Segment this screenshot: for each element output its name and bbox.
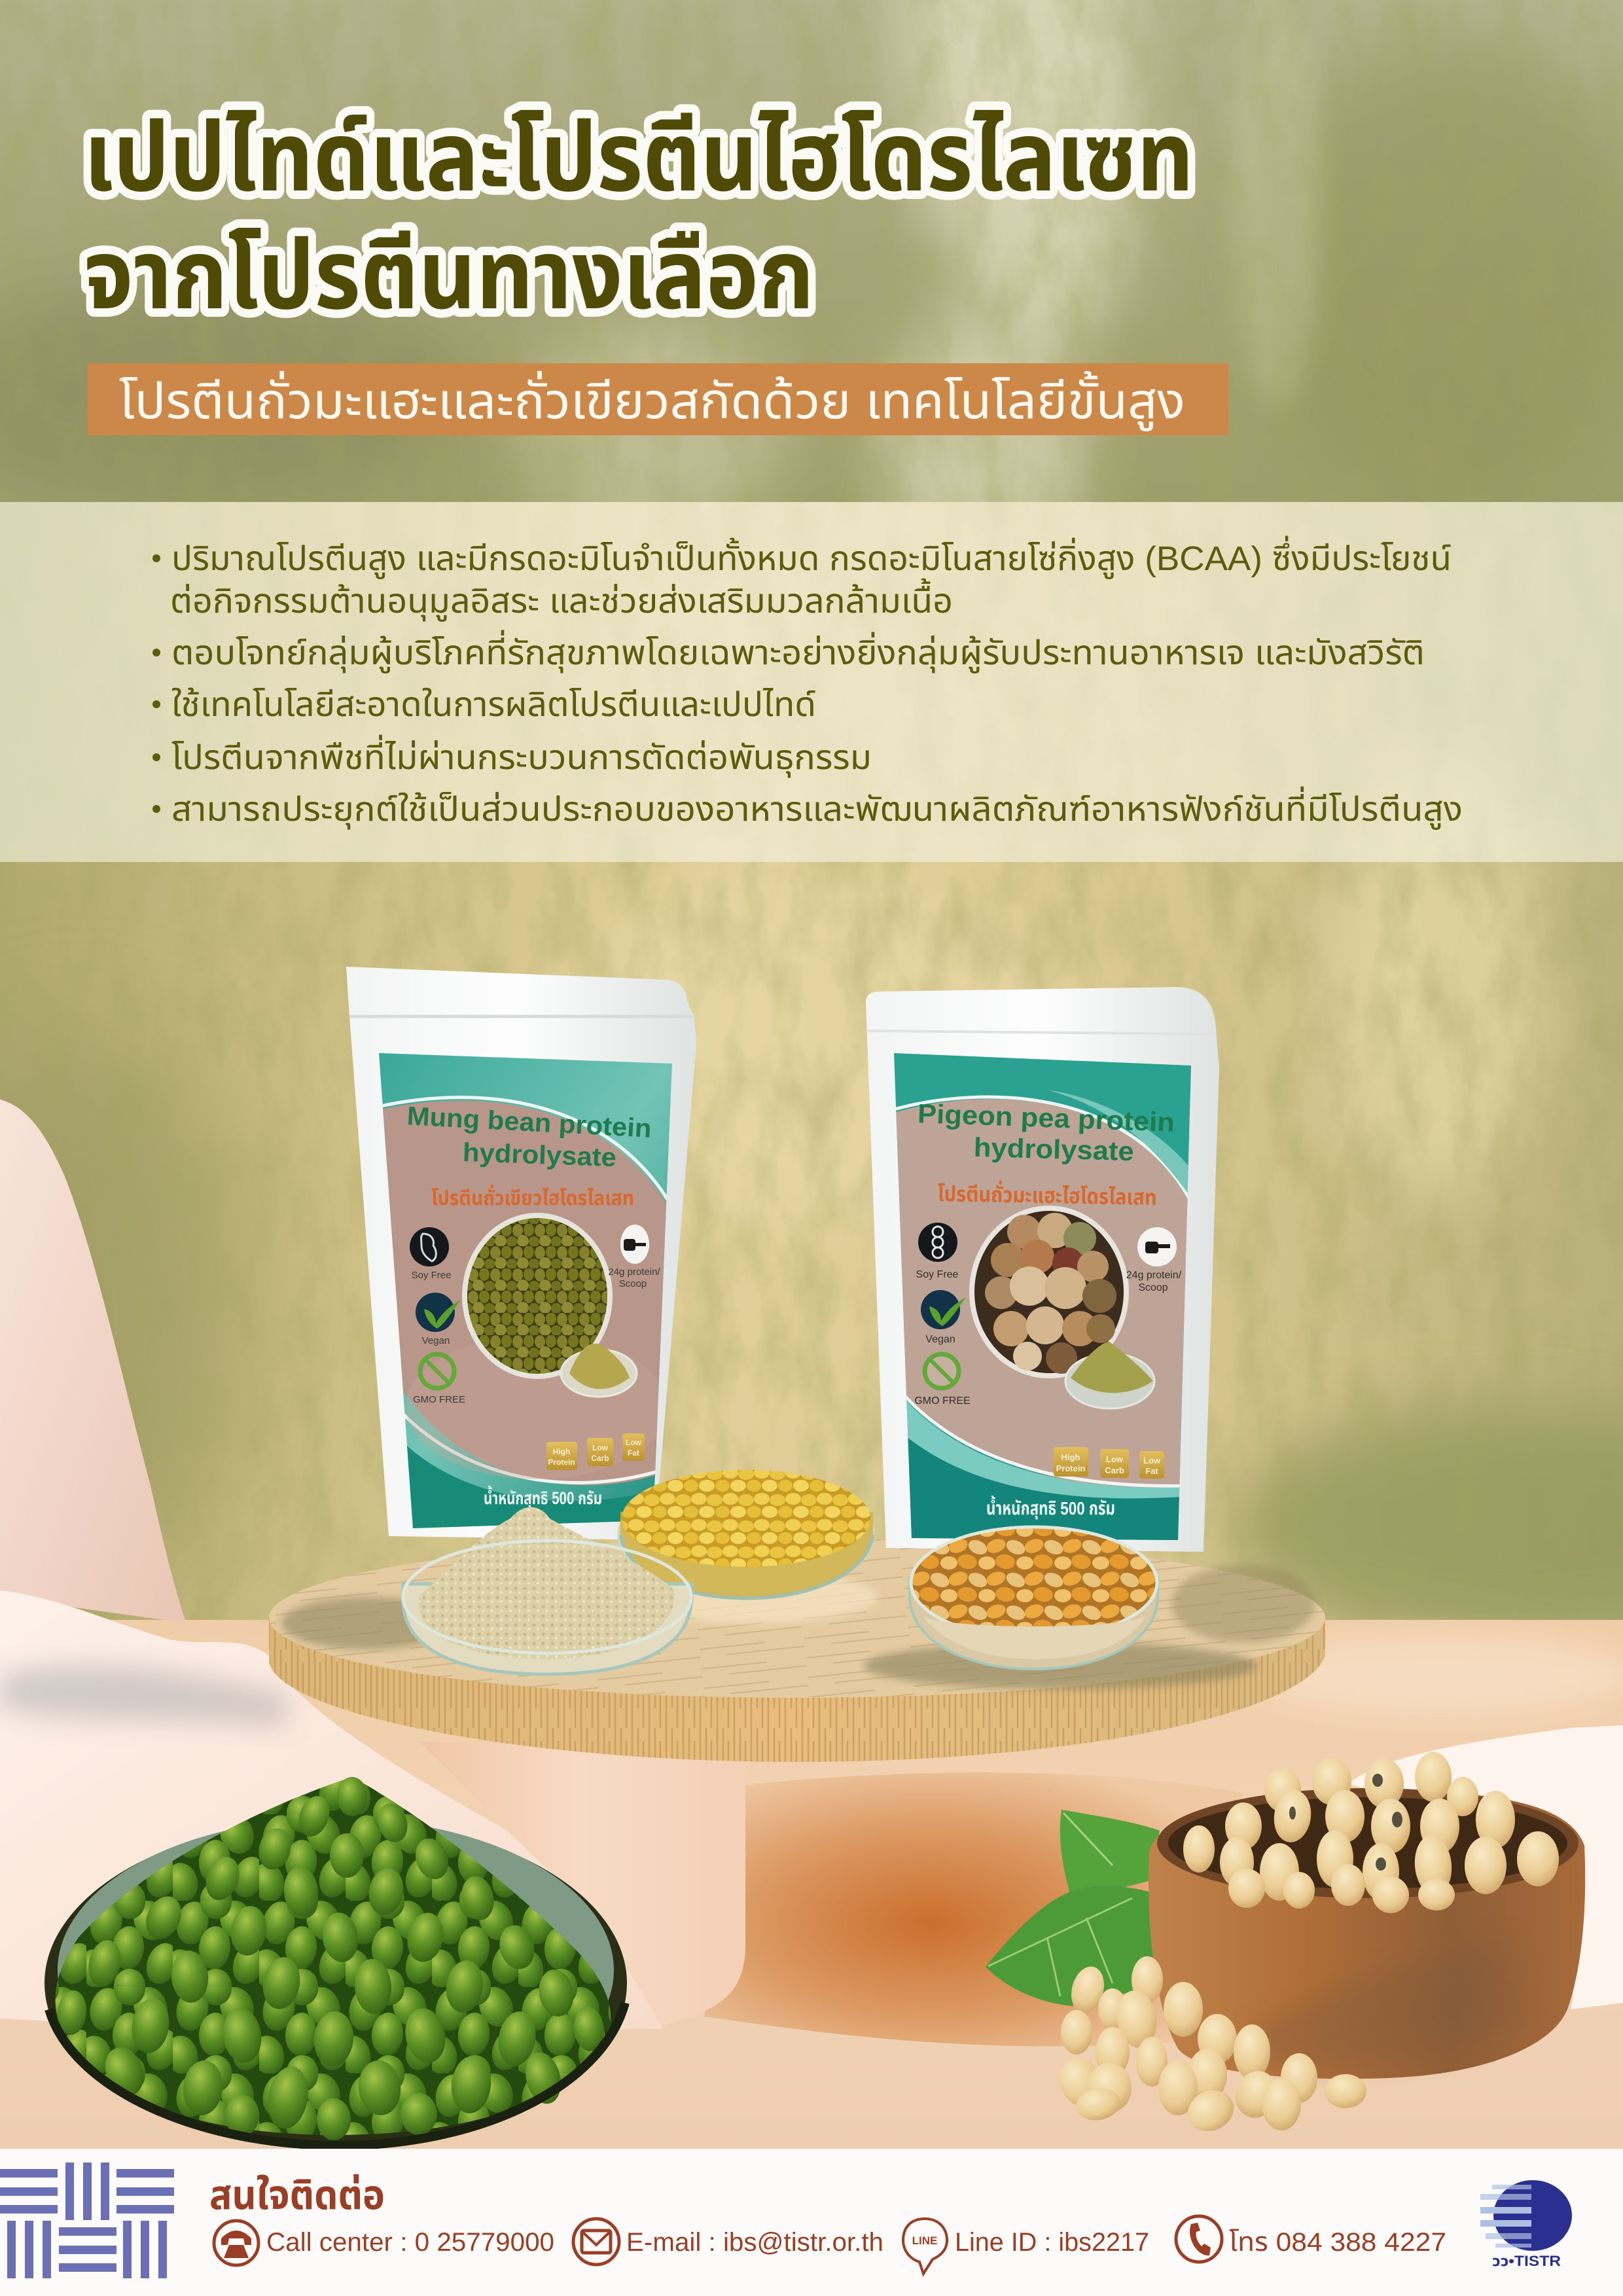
pigeon pouch pea photo	[969, 1206, 1154, 1408]
TISTR logo: วว•TISTR	[1492, 2253, 1561, 2269]
mung pouch bean photo	[462, 1213, 637, 1397]
floor orange shadow	[704, 1772, 1243, 2046]
call center contact	[214, 2221, 554, 2265]
footer contact heading: สนใจติดต่อ	[209, 2173, 385, 2218]
subtitle banner	[88, 363, 1228, 435]
mung pouch badges: Low	[626, 1438, 642, 1447]
pigeon pouch badges: 24g protein/	[1126, 1270, 1182, 1281]
pigeon pouch badges: GMO FREE	[914, 1395, 971, 1407]
footer weave logo	[0, 2162, 174, 2278]
email contact: E-mail : ibs@tistr.or.th	[626, 2228, 883, 2257]
mung pouch weight: น้ำหนักสุทธิ 500 กรัม	[484, 1486, 602, 1509]
pigeon pouch badges: Scoop	[1138, 1282, 1168, 1293]
pigeon pouch badges: Low	[1143, 1456, 1161, 1465]
product pouch: pigeon pea	[866, 987, 1219, 1552]
email contact	[573, 2219, 883, 2265]
subtitle banner: โปรตีนถั่วมะแฮะและถั่วเขียวสกัดด้วย เทคโนโลยีขั้นสูง	[119, 370, 1185, 431]
title: จากโปรตีนทางเลือก	[84, 221, 814, 329]
pigeon pouch text: hydrolysate	[973, 1132, 1134, 1166]
mung pouch badges: Scoop	[619, 1278, 647, 1289]
pigeon pouch badges: High	[1061, 1452, 1080, 1462]
white cloth right	[1348, 1725, 1623, 2009]
soybeans in bowl	[1183, 1752, 1559, 1913]
pigeon pouch text: โปรตีนถั่วมะแฮะไฮโดรไลเสท	[937, 1179, 1157, 1210]
translucent text band	[0, 502, 1623, 862]
phone contact	[1176, 2216, 1446, 2262]
pigeon pouch badges: Vegan	[925, 1334, 955, 1345]
pedestal column	[419, 1741, 745, 2026]
mung pouch badges	[410, 1225, 660, 1470]
pigeon pouch text: Pigeon pea protein	[917, 1098, 1175, 1138]
title: เปปไทด์และโปรตีนไฮโดรไลเซท	[84, 103, 1194, 211]
mung pouch badges: High	[553, 1447, 570, 1456]
pigeon pouch badges	[914, 1223, 1182, 1479]
footer panel	[0, 2149, 1623, 2296]
mung pouch badges: Carb	[591, 1454, 609, 1463]
mung pouch badges: GMO FREE	[413, 1394, 465, 1405]
mung pouch badges: Vegan	[422, 1335, 450, 1346]
wooden bowl of soybeans	[1149, 1752, 1585, 2079]
TISTR logo	[1480, 2180, 1572, 2269]
pigeon pouch label	[894, 1053, 1191, 1540]
bullet 1: ต่อกิจกรรมต้านอนุมูลอิสระ และช่วยส่งเสริมมวลกล้ามเนื้อ	[170, 578, 953, 622]
mung pouch badges: Low	[592, 1443, 609, 1452]
mung beans foreground	[56, 1777, 606, 2140]
line contact: LINE	[912, 2234, 937, 2247]
mung beans plate	[45, 1777, 627, 2147]
bullet 3: ใช้เทคโนโลยีสะอาดในการผลิตโปรตีนและเปปไทด์	[171, 686, 816, 724]
mung pouch badges: Protein	[548, 1458, 575, 1467]
mung pouch badges: Soy Free	[412, 1270, 451, 1281]
bullet 2: ตอบโจทย์กลุ่มผู้บริโภคที่รักสุขภาพโดยเฉพาะอย่างยิ่งกลุ่มผู้รับประทานอาหารเจ และมังสวิรัติ	[171, 630, 1425, 673]
title	[84, 103, 1194, 329]
bullet list	[152, 535, 1463, 830]
call center contact: Call center : 0 25779000	[266, 2228, 554, 2257]
pigeon pouch badges: Protein	[1056, 1463, 1085, 1473]
bullet 5: สามารถประยุกต์ใช้เป็นส่วนประกอบของอาหารและพัฒนาผลิตภัณฑ์อาหารฟังก์ชันที่มีโปรตีนสูง	[171, 786, 1463, 830]
wooden round table	[269, 1538, 1325, 1762]
mung pouch text: โปรตีนถั่วเขียวไฮโดรไลเสท	[431, 1184, 634, 1210]
pigeon pouch badges: Fat	[1145, 1466, 1158, 1476]
loose soybeans	[1054, 1956, 1366, 2138]
pigeon pouch badges: Carb	[1105, 1465, 1124, 1475]
white cloth left	[0, 1590, 662, 2029]
green leaves	[986, 1810, 1160, 2006]
pigeon pouch badges: Low	[1106, 1454, 1124, 1464]
petri dish: powder	[403, 1507, 692, 1674]
petri dish: yellow split beans	[619, 1470, 873, 1598]
petri dish: orange split peas	[910, 1527, 1158, 1669]
mung pouch text	[406, 1102, 652, 1210]
phone contact: โทร 084 388 4227	[1229, 2228, 1446, 2257]
pigeon pouch badges: Soy Free	[916, 1269, 959, 1280]
line contact	[903, 2219, 1149, 2274]
mung pouch label	[366, 1047, 681, 1538]
pigeon pouch weight: น้ำหนักสุทธิ 500 กรัม	[986, 1495, 1115, 1519]
mung pouch badges: 24g protein/	[608, 1266, 660, 1278]
mung pouch text: hydrolysate	[462, 1138, 617, 1172]
mung pouch text: Mung bean protein	[406, 1102, 652, 1143]
bullet 1	[152, 535, 1452, 622]
product pouch: mung bean	[346, 967, 696, 1540]
bullet 1: ปริมาณโปรตีนสูง และมีกรดอะมิโนจำเป็นทั้งหมด กรดอะมิโนสายโซ่กิ่งสูง (BCAA) ซึ่งมีประโยชน์	[171, 535, 1452, 579]
line contact: Line ID : ibs2217	[955, 2228, 1149, 2257]
pigeon pouch text	[917, 1098, 1175, 1210]
bullet 4: โปรตีนจากพืชที่ไม่ผ่านกระบวนการตัดต่อพันธุกรรม	[171, 734, 872, 778]
pink stone left	[0, 1100, 187, 1623]
mung pouch badges: Fat	[628, 1448, 639, 1458]
